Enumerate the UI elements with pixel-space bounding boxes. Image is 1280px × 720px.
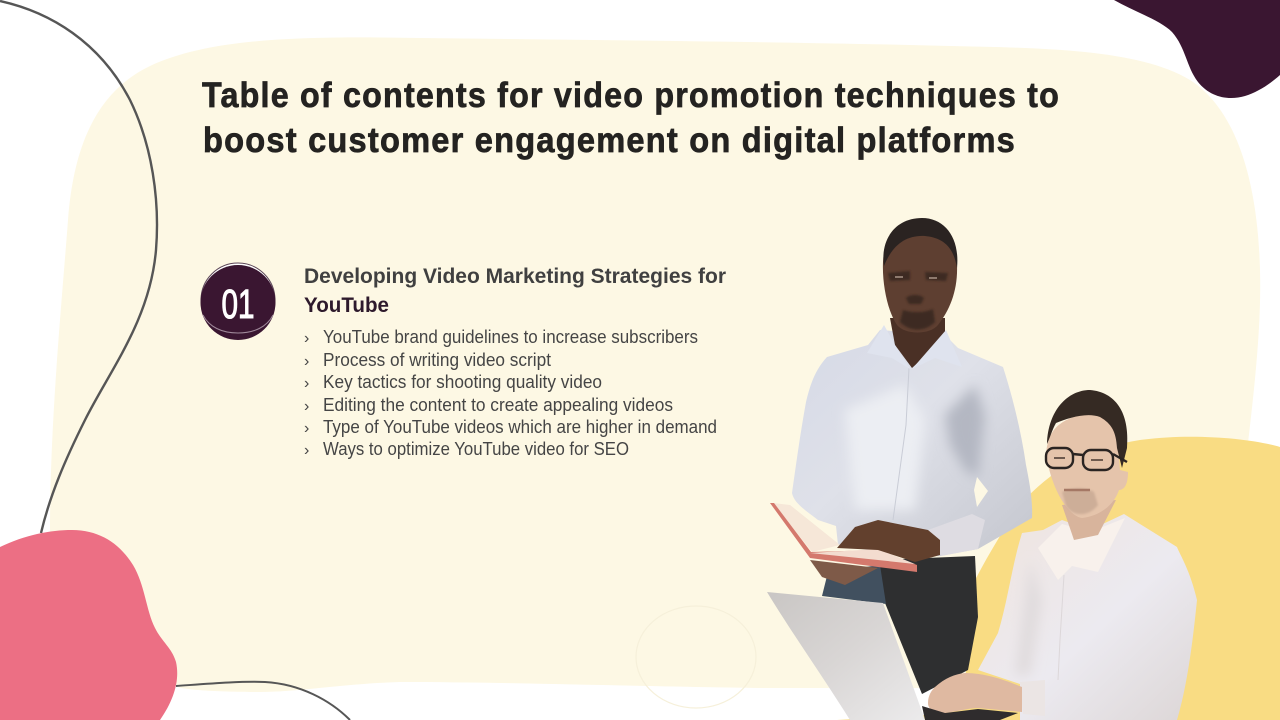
glasses — [1046, 448, 1127, 470]
decorative curved line bottom — [176, 682, 350, 720]
bright shirt front — [845, 385, 925, 510]
open book edges — [770, 503, 917, 572]
bullet list: Editing the content to create appealing videos — [323, 395, 673, 415]
keyboard — [922, 706, 1018, 720]
gap between arm and body — [974, 477, 988, 507]
decorative curved line upper left — [0, 1, 157, 533]
book front page — [810, 549, 915, 564]
pink blob bottom left — [0, 530, 177, 720]
hair — [883, 218, 957, 268]
stubble — [1062, 488, 1098, 514]
bullet list: Ways to optimize YouTube video for SEO — [323, 439, 629, 459]
standing man with book — [770, 218, 1032, 694]
bullet list: › — [304, 330, 309, 347]
upper hand — [837, 520, 940, 562]
bullet list: › — [304, 442, 309, 459]
head — [883, 228, 957, 332]
section heading — [304, 265, 726, 317]
trousers — [878, 556, 978, 694]
shirt shadow fold — [945, 385, 985, 478]
bullet list: YouTube brand guidelines to increase subscribers — [323, 327, 698, 347]
face shadows — [888, 271, 948, 330]
section heading: Developing Video Marketing Strategies for — [304, 265, 726, 288]
title: boost customer engagement on digital platforms — [203, 121, 1016, 160]
title: Table of contents for video promotion techniques to — [202, 76, 1060, 115]
title — [202, 76, 1060, 160]
shirt — [978, 514, 1197, 720]
shirt cuff — [1020, 680, 1045, 716]
hair — [1047, 390, 1127, 468]
bullet list: Type of YouTube videos which are higher in demand — [323, 417, 717, 437]
bullet list — [304, 327, 717, 459]
section heading: YouTube — [304, 294, 389, 317]
placket line — [1058, 575, 1064, 680]
dark plum blob top right — [1114, 0, 1280, 98]
bullet list: › — [304, 420, 309, 437]
placket line — [893, 368, 909, 520]
eyes — [1054, 458, 1103, 460]
yellow blob behind people — [837, 437, 1280, 720]
bullet list: › — [304, 375, 309, 392]
neck — [890, 318, 945, 368]
collar — [867, 325, 962, 369]
number badge 01 — [200, 263, 276, 340]
bullet list: › — [304, 353, 309, 370]
head — [1046, 413, 1128, 518]
bullet list: Key tactics for shooting quality video — [323, 372, 602, 392]
faint decorative circle — [636, 606, 756, 708]
laptop lid — [767, 592, 925, 720]
lower hand — [810, 560, 878, 585]
neck — [1062, 500, 1116, 540]
laptop — [767, 592, 1018, 720]
hand — [928, 673, 1022, 713]
open book pages — [773, 503, 840, 552]
bullet list: › — [304, 398, 309, 415]
cuff — [928, 514, 985, 556]
mouth — [1064, 489, 1090, 491]
eyes — [895, 277, 937, 278]
collar — [1038, 518, 1125, 580]
bullet list: Process of writing video script — [323, 350, 551, 370]
seated man with glasses — [928, 390, 1197, 720]
jeans left side — [822, 565, 886, 604]
sleeve fold shadow — [1015, 560, 1042, 675]
shirt — [792, 330, 1032, 556]
number badge 01: 01 — [222, 281, 254, 327]
